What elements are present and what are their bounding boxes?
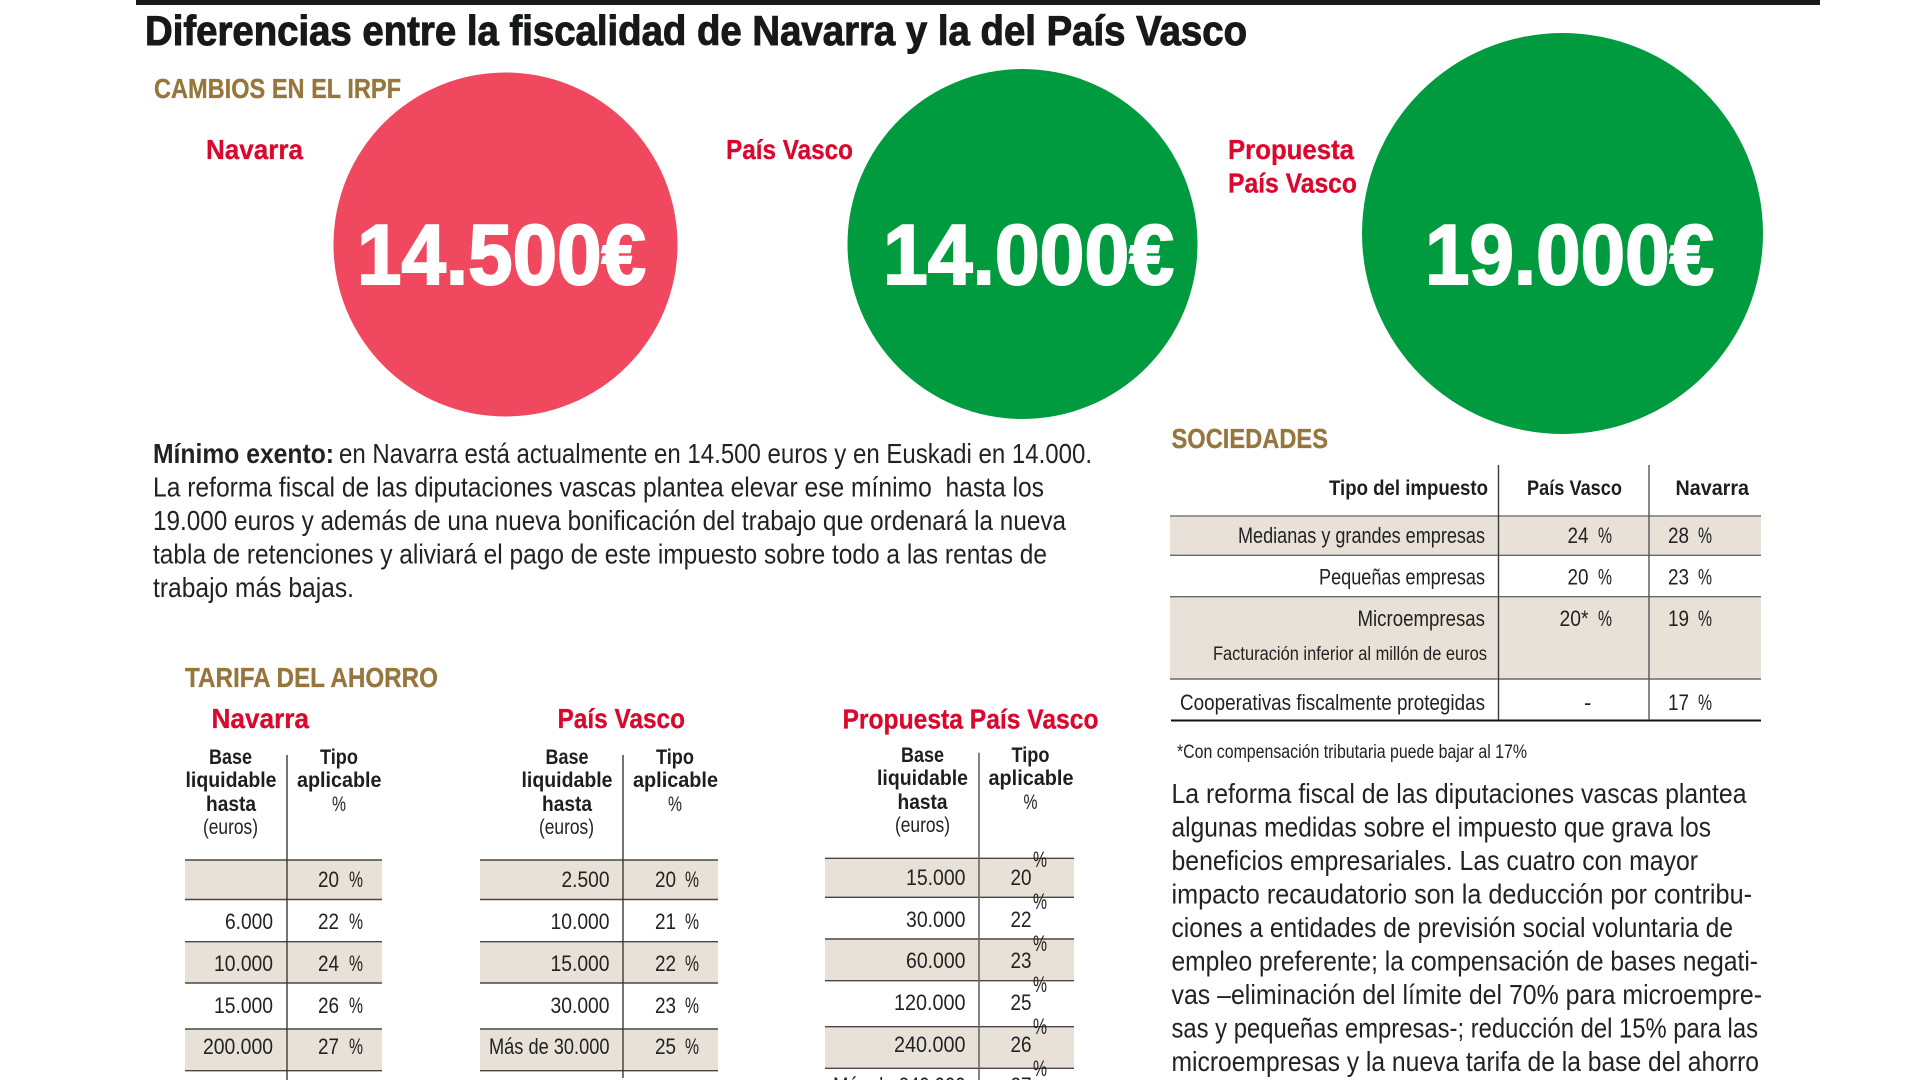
table: propuesta País Vasco: 20 xyxy=(1010,865,1032,890)
table: País Vasco: 2.500 xyxy=(562,867,610,892)
table: propuesta País Vasco: liquidable xyxy=(877,767,968,790)
table: País Vasco: 20 xyxy=(655,867,676,892)
table: sociedades: Tipo del impuesto xyxy=(1329,477,1488,500)
table: propuesta País Vasco: 26 xyxy=(1010,1032,1032,1057)
table: País Vasco: 22 xyxy=(655,951,676,976)
circle: Navarra xyxy=(206,72,678,416)
table: sociedades: % xyxy=(1698,606,1712,631)
text block: reforma sociedades: impacto recaudatorio son la deducción por contribu- xyxy=(1172,878,1752,910)
text block: reforma sociedades: microempresas y la nueva tarifa de la base del ahorro xyxy=(1172,1046,1759,1077)
table: Navarra: 6.000 xyxy=(225,909,273,934)
table: sociedades: Microempresas xyxy=(1358,606,1485,631)
table: País Vasco: 15.000 xyxy=(550,951,610,976)
circle: Navarra: Navarra xyxy=(206,134,303,165)
table: País Vasco xyxy=(480,703,718,1078)
table: sociedades: 28 xyxy=(1668,523,1689,548)
table: propuesta País Vasco: 120.000 xyxy=(894,990,966,1015)
text block: reforma sociedades: beneficios empresariales. Las cuatro con mayor xyxy=(1172,845,1698,876)
table: Navarra: 10.000 xyxy=(214,951,273,976)
table: sociedades: 17 xyxy=(1668,690,1689,715)
table: Navarra: (euros) xyxy=(203,816,258,839)
table: Navarra: 20 xyxy=(318,867,339,892)
table: País Vasco: aplicable xyxy=(633,769,718,792)
table: sociedades: 20* xyxy=(1560,606,1589,631)
table: País Vasco: Tipo xyxy=(656,746,694,769)
table: Navarra: 24 xyxy=(318,951,339,976)
table: sociedades: % xyxy=(1698,564,1712,590)
table: Navarra: % xyxy=(349,867,363,892)
circle: propuesta País Vasco: 19.000€ xyxy=(1425,208,1714,303)
table: sociedades: 19 xyxy=(1668,606,1689,631)
text block: reforma sociedades: sas y pequeñas empresas-; reducción del 15% para las xyxy=(1172,1012,1758,1044)
table: propuesta País Vasco xyxy=(825,704,1098,1080)
text block: mínimo exento: tabla de retenciones y aliviará el pago de este impuesto sobre todo a las rentas de xyxy=(153,538,1047,570)
heading: cambios en el IRPF: CAMBIOS EN EL IRPF xyxy=(154,73,401,104)
circle: propuesta País Vasco: País Vasco xyxy=(1228,168,1357,198)
table: sociedades: % xyxy=(1698,690,1712,715)
table: País Vasco: 30.000 xyxy=(550,993,610,1018)
table: País Vasco: % xyxy=(685,909,699,934)
circle: País Vasco: País Vasco xyxy=(726,134,853,165)
panel: tarifa del ahorro xyxy=(185,662,1098,1080)
table: propuesta País Vasco: % xyxy=(1033,931,1047,956)
heading: sociedades: SOCIEDADES xyxy=(1172,423,1328,454)
panel: cambios en el IRPF xyxy=(154,33,1763,434)
text block: reforma sociedades: algunas medidas sobre el impuesto que grava los xyxy=(1172,812,1711,842)
table: sociedades: % xyxy=(1598,564,1612,590)
table: País Vasco: 21 xyxy=(655,909,676,934)
table: sociedades: Pequeñas empresas xyxy=(1319,564,1485,590)
table: Navarra: Base xyxy=(209,746,252,769)
table: propuesta País Vasco: Propuesta País Vasco xyxy=(842,704,1098,734)
table: sociedades xyxy=(1170,465,1761,720)
table: propuesta País Vasco: % xyxy=(1033,972,1047,997)
text block: reforma sociedades: empleo preferente; la compensación de bases negati- xyxy=(1172,946,1758,976)
table: sociedades: Cooperativas fiscalmente protegidas xyxy=(1180,690,1485,715)
text block: mínimo exento xyxy=(153,438,1092,603)
table: Navarra: aplicable xyxy=(297,769,382,792)
table: propuesta País Vasco: (euros) xyxy=(895,814,950,837)
table: propuesta País Vasco: Tipo xyxy=(1012,744,1050,767)
table: propuesta País Vasco: 22 xyxy=(1010,907,1032,932)
heading: tarifa del ahorro: TARIFA DEL AHORRO xyxy=(185,662,438,693)
table: sociedades: Navarra xyxy=(1676,477,1749,500)
table: Navarra: 27 xyxy=(318,1034,339,1059)
table: País Vasco: 10.000 xyxy=(550,909,610,934)
table: propuesta País Vasco: 23 xyxy=(1010,948,1032,973)
text block: mínimo exento: en Navarra está actualmente en 14.500 euros y en Euskadi en 14.000. xyxy=(339,438,1092,469)
table: propuesta País Vasco: Base xyxy=(901,744,944,767)
text block: mínimo exento: trabajo más bajas. xyxy=(153,572,354,603)
table: propuesta País Vasco: 30.000 xyxy=(906,907,966,932)
table: País Vasco: 23 xyxy=(655,993,676,1018)
table: propuesta País Vasco: 15.000 xyxy=(906,865,966,890)
table: Navarra: % xyxy=(349,909,363,934)
table: Navarra: % xyxy=(349,1034,363,1059)
table: País Vasco: % xyxy=(685,867,699,892)
table: Navarra: 22 xyxy=(318,909,339,934)
table: Navarra: % xyxy=(349,993,363,1018)
table: País Vasco: % xyxy=(685,993,699,1018)
title: Diferencias entre la fiscalidad de Navarra y la del País Vasco xyxy=(145,7,1247,54)
text block: reforma sociedades: La reforma fiscal de las diputaciones vascas plantea xyxy=(1172,778,1747,809)
table: sociedades: País Vasco xyxy=(1527,477,1622,500)
table: Navarra: % xyxy=(332,793,346,816)
table: Navarra: 200.000 xyxy=(203,1034,273,1059)
table: País Vasco: País Vasco xyxy=(558,703,685,734)
circle: País Vasco: 14.000€ xyxy=(883,208,1174,303)
table: sociedades: Medianas y grandes empresas xyxy=(1238,523,1485,548)
table: Navarra: % xyxy=(349,951,363,976)
footnote: *Con compensación tributaria puede bajar al 17% xyxy=(1177,742,1527,763)
table: propuesta País Vasco: % xyxy=(1033,889,1047,914)
table: propuesta País Vasco: hasta xyxy=(898,791,948,814)
table: Navarra: Tipo xyxy=(320,746,358,769)
circle: propuesta País Vasco: Propuesta xyxy=(1228,134,1354,165)
table: País Vasco: (euros) xyxy=(539,816,594,839)
table: sociedades: 20 xyxy=(1568,564,1588,590)
table: País Vasco: % xyxy=(685,951,699,976)
table: propuesta País Vasco: 25 xyxy=(1010,990,1032,1015)
table: sociedades: 23 xyxy=(1668,564,1689,590)
table: Navarra: 15.000 xyxy=(214,993,273,1018)
text block: reforma sociedades xyxy=(1172,778,1762,1077)
table: Navarra: Navarra xyxy=(212,703,309,734)
text block: reforma sociedades: vas –eliminación del límite del 70% para microempre- xyxy=(1172,979,1762,1010)
table: País Vasco: % xyxy=(668,793,682,816)
table: Navarra: hasta xyxy=(206,793,256,816)
table: sociedades: % xyxy=(1598,523,1612,548)
text block: reforma sociedades: ciones a entidades de previsión social voluntaria de xyxy=(1172,912,1733,943)
table: Navarra: liquidable xyxy=(186,769,276,792)
table: sociedades: % xyxy=(1698,523,1712,548)
table: propuesta País Vasco: % xyxy=(1024,791,1038,814)
table: sociedades: 24 xyxy=(1568,523,1588,548)
table: País Vasco: Más de 30.000 xyxy=(489,1034,610,1059)
circle: propuesta País Vasco xyxy=(1228,33,1763,434)
text block: mínimo exento: 19.000 euros y además de una nueva bonificación del trabajo que ordenará la nueva xyxy=(153,505,1066,536)
top rule xyxy=(136,0,1820,5)
table: País Vasco: Base xyxy=(546,746,588,769)
table: sociedades: - xyxy=(1584,690,1591,715)
table: propuesta País Vasco: 60.000 xyxy=(906,948,966,973)
table: sociedades: Facturación inferior al millón de euros xyxy=(1213,644,1487,665)
circle: País Vasco xyxy=(726,69,1198,419)
table: Navarra xyxy=(185,703,382,1080)
table: Navarra: 26 xyxy=(318,993,339,1018)
table: propuesta País Vasco: % xyxy=(1033,1014,1047,1039)
table: sociedades: % xyxy=(1598,606,1612,631)
table: País Vasco: 25 xyxy=(655,1034,676,1059)
table: propuesta País Vasco: aplicable xyxy=(988,767,1074,790)
circle: Navarra: 14.500€ xyxy=(357,208,646,303)
text block: mínimo exento: Mínimo exento: xyxy=(153,438,334,469)
table: propuesta País Vasco: 240.000 xyxy=(894,1032,966,1057)
table: País Vasco: % xyxy=(685,1034,699,1059)
table: País Vasco: liquidable xyxy=(522,769,612,792)
table: País Vasco: hasta xyxy=(542,793,592,816)
panel: sociedades xyxy=(1170,423,1762,1077)
text block: mínimo exento: La reforma fiscal de las diputaciones vascas plantea elevar ese mínimo hasta los xyxy=(153,472,1044,502)
table: propuesta País Vasco: % xyxy=(1033,847,1047,872)
